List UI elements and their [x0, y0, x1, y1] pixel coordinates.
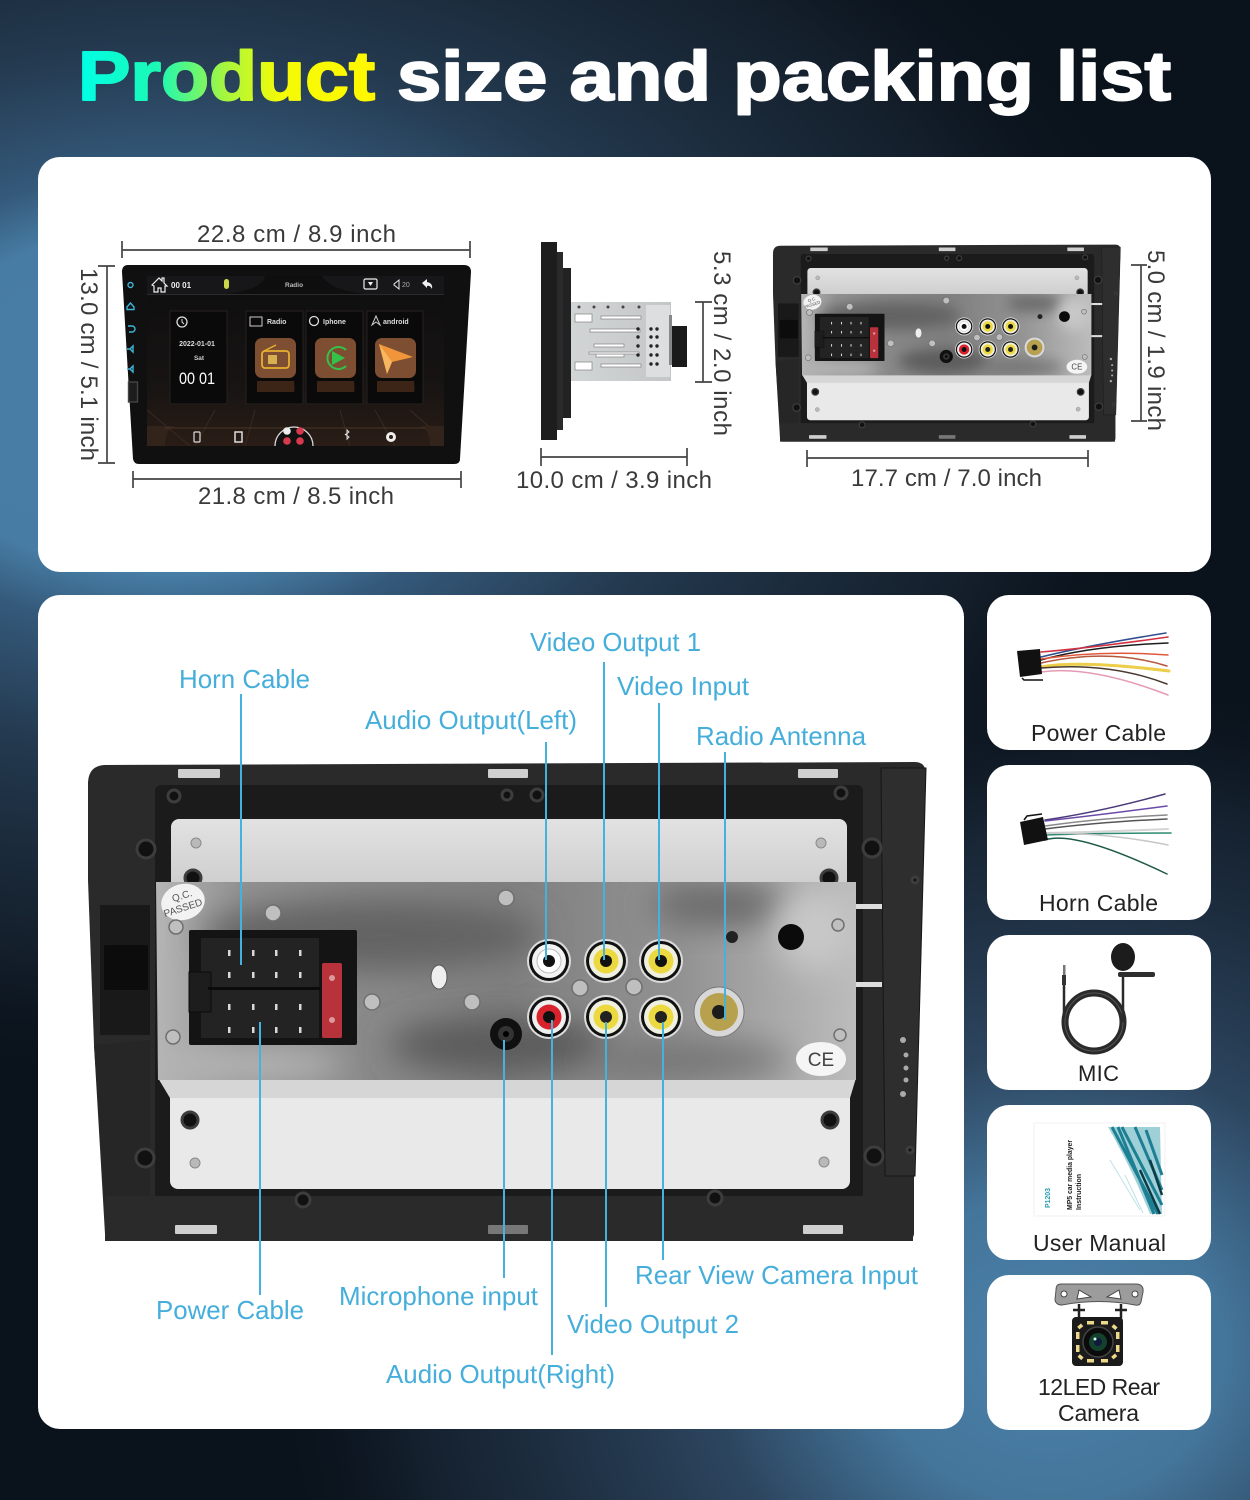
app tile: iphone: Iphone — [323, 319, 346, 326]
text: camera label: Camera — [1058, 1400, 1139, 1426]
RCA jack: rear camera — [639, 995, 683, 1039]
app tile: android: android — [383, 319, 409, 326]
icon: power cable wires — [1017, 633, 1169, 695]
text: User Manual: User Manual — [1033, 1230, 1166, 1256]
card: horn cable — [987, 765, 1211, 920]
text: MIC: MIC — [1078, 1061, 1119, 1086]
product back view with ports — [88, 762, 926, 1241]
product back view small — [773, 245, 1120, 442]
label: Video Output 1: Video Output 1 — [530, 627, 701, 657]
screen top bar: 00 01 — [171, 281, 192, 290]
left side buttons — [127, 282, 138, 402]
label: Video Input: Video Input — [617, 671, 750, 701]
RCA jack: video output 2 — [584, 995, 628, 1039]
screen top bar: 20 — [402, 282, 410, 289]
radio antenna socket — [694, 987, 744, 1037]
title — [78, 37, 1171, 115]
app tile: android — [367, 311, 423, 404]
RCA jack: audio left — [527, 939, 571, 983]
dimension: front width top — [122, 221, 470, 258]
icon: manual booklet: Instruction — [1076, 1174, 1083, 1210]
panel: connection diagram — [38, 595, 964, 1429]
sticker: CE: CE — [808, 1050, 834, 1071]
power connector — [189, 930, 357, 1045]
label: Microphone input: Microphone input — [339, 1281, 539, 1311]
screen top bar — [152, 278, 432, 292]
sticker: QC passed: PASSED — [163, 897, 204, 920]
card: rear camera — [987, 1275, 1211, 1430]
clock tile — [170, 311, 227, 404]
dimension: front height: 13.0 cm / 5.1 inch — [75, 268, 102, 461]
label: Video Output 2: Video Output 2 — [567, 1309, 739, 1339]
dimension: side depth — [516, 448, 712, 494]
clock tile: 00 01 — [179, 369, 215, 388]
dimension: front height — [75, 266, 115, 463]
dimension: side depth: 10.0 cm / 3.9 inch — [516, 467, 712, 494]
label: Radio Antenna: Radio Antenna — [696, 721, 867, 751]
icon: manual booklet: P1203 — [1045, 1188, 1052, 1208]
app tile: radio: Radio — [267, 319, 286, 326]
card: power cable — [987, 595, 1211, 750]
card: MIC — [987, 935, 1211, 1090]
panel: product size — [38, 157, 1211, 572]
clock tile: 2022-01-01 — [179, 341, 215, 348]
screen top bar: Radio — [285, 282, 303, 289]
sticker: QC passed — [157, 879, 209, 925]
RCA jack: video input — [639, 939, 683, 983]
metal plate — [155, 882, 856, 1081]
label: Audio Output Right: Audio Output(Right) — [386, 1359, 615, 1389]
app tile: iphone — [306, 311, 363, 404]
label: Power Cable: Power Cable — [156, 1295, 304, 1325]
icon: horn cable wires — [1020, 794, 1171, 874]
dimension: front width top: 22.8 cm / 8.9 inch — [197, 221, 396, 248]
dimension: back height: 5.0 cm / 1.9 inch — [1142, 250, 1169, 431]
dimension: front width bottom: 21.8 cm / 8.5 inch — [198, 483, 394, 510]
text: camera label — [1038, 1374, 1160, 1426]
card: user manual — [987, 1105, 1211, 1260]
icon: manual booklet — [1034, 1123, 1165, 1216]
dimension: back width — [807, 450, 1088, 492]
dimension: side height: 5.3 cm / 2.0 inch — [708, 251, 735, 436]
bottom dock — [194, 427, 394, 446]
text: Horn Cable: Horn Cable — [1039, 890, 1158, 916]
label: Horn Cable: Horn Cable — [179, 664, 310, 694]
sticker: CE — [796, 1042, 846, 1076]
icon: rear camera — [1055, 1284, 1143, 1366]
label: Audio Output Left: Audio Output(Left) — [365, 705, 577, 735]
title: Product — [78, 37, 375, 115]
product front screen — [122, 265, 471, 464]
label: Rear View Camera Input: Rear View Camera Input — [635, 1260, 919, 1290]
RCA jack: audio right — [527, 995, 571, 1039]
sticker: QC passed: Q.C. — [171, 888, 194, 905]
dimension: side height — [695, 251, 735, 436]
title: size and packing list — [397, 37, 1171, 115]
screws on metal plate — [166, 890, 846, 1044]
app tile: radio — [246, 311, 303, 404]
icon: manual booklet: MP5 car media player — [1067, 1140, 1074, 1210]
dimension: back width: 17.7 cm / 7.0 inch — [851, 465, 1042, 492]
text: Power Cable: Power Cable — [1031, 720, 1166, 746]
RCA jack: video output 1 — [584, 939, 628, 983]
dimension: front width bottom — [133, 471, 461, 510]
text: camera label: 12LED Rear — [1038, 1374, 1160, 1400]
clock tile: Sat — [194, 355, 205, 362]
icon: microphone — [1062, 943, 1155, 1051]
product side view — [541, 242, 687, 440]
microphone jack — [490, 1018, 522, 1050]
